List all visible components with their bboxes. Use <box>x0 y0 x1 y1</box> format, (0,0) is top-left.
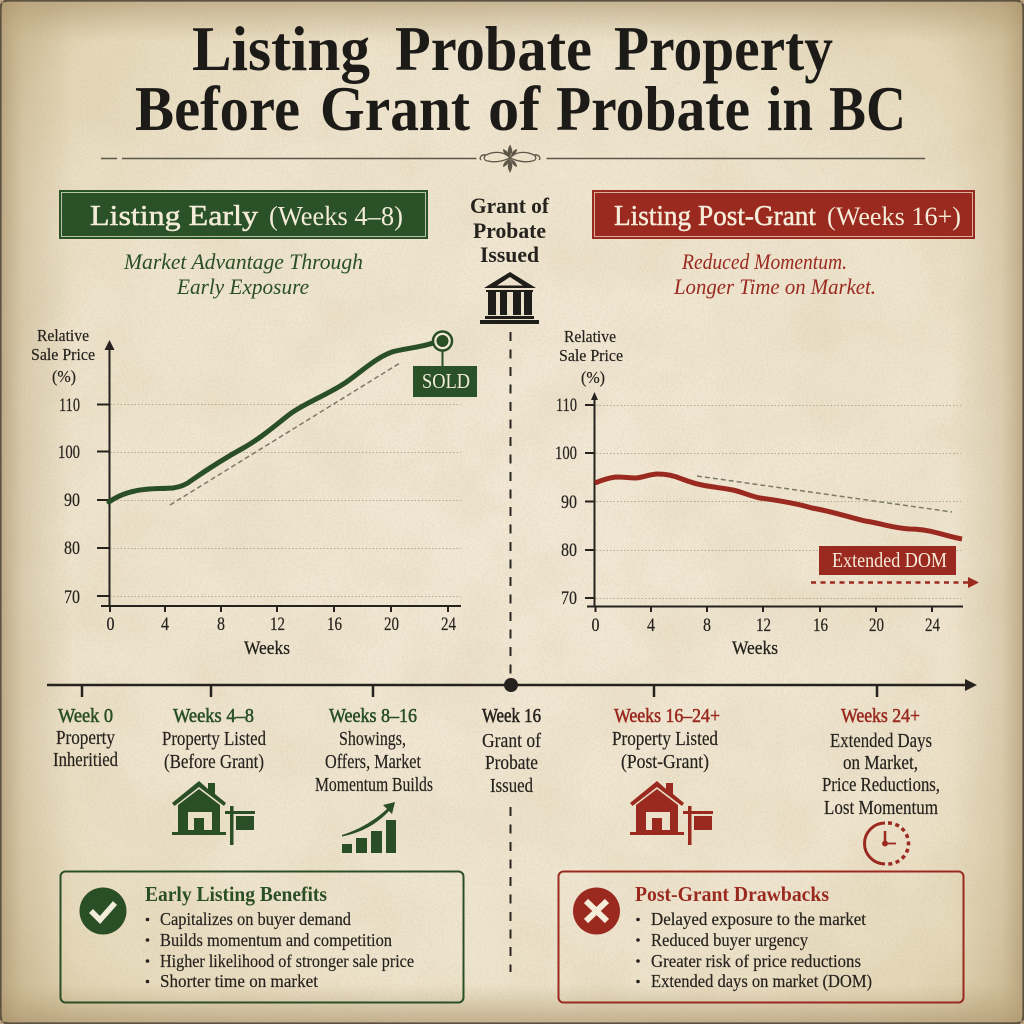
x tick labels: 0 <box>106 615 114 635</box>
timeline: week 16: Week 16 <box>482 705 541 727</box>
y tick labels: 70 <box>64 588 80 608</box>
x tick labels: 8 <box>217 615 225 635</box>
y axis title: Relative <box>37 326 89 345</box>
center label: grant of probate issued: Probate <box>473 218 546 243</box>
sold marker <box>413 332 477 397</box>
icon: clock <box>864 823 908 864</box>
axis arrow <box>104 340 114 350</box>
subtitle: market advantage <box>123 249 363 299</box>
icon: x mark <box>573 888 620 934</box>
y tick labels: 90 <box>561 493 577 513</box>
y tick labels: 110 <box>556 396 577 416</box>
timeline: weeks 4-8 <box>162 705 266 773</box>
drawbacks list: Greater risk of price reductions <box>651 951 861 971</box>
title: Probate <box>395 13 592 84</box>
timeline: weeks 8-16 <box>315 705 433 796</box>
subtitle: market advantage: Market Advantage Through <box>123 249 363 274</box>
benefits heading: Early Listing Benefits <box>145 882 327 906</box>
y tick labels: 110 <box>59 396 80 416</box>
timeline: weeks 24+: Lost Momentum <box>824 797 938 819</box>
timeline: weeks 24+ <box>822 705 940 819</box>
icon: green house with sign <box>172 781 255 845</box>
x axis title: Weeks <box>732 638 778 659</box>
timeline: weeks 8-16: Weeks 8–16 <box>329 705 417 727</box>
y tick labels: 90 <box>64 491 80 511</box>
x tick labels: 20 <box>384 615 399 635</box>
drawbacks heading: Post-Grant Drawbacks <box>635 882 829 906</box>
y tick labels <box>58 396 80 608</box>
red price curve <box>595 474 962 539</box>
timeline: weeks 4-8: (Before Grant) <box>164 751 264 773</box>
panel: listing early header: (Weeks 4–8) <box>269 201 403 231</box>
y tick labels <box>555 396 577 609</box>
x tick labels: 24 <box>441 615 456 635</box>
panel: early listing benefits <box>60 872 464 1002</box>
y axis title <box>559 327 623 387</box>
y tick labels: 70 <box>561 589 577 609</box>
center label: grant of probate issued: Issued <box>480 242 539 267</box>
x tick labels: 8 <box>703 616 711 636</box>
timeline: weeks 16-24+ <box>612 705 720 773</box>
chart: early listing sale price <box>31 326 477 659</box>
trend line <box>697 476 952 512</box>
center label: grant of probate issued <box>470 193 550 267</box>
y axis title: Relative <box>564 327 616 346</box>
center dashed divider <box>510 332 512 972</box>
drawbacks list: Reduced buyer urgency <box>651 930 808 950</box>
timeline: week 0 <box>53 705 118 771</box>
panel: listing post-grant header: (Weeks 16+) <box>827 202 961 231</box>
x tick labels: 12 <box>270 615 285 635</box>
benefits list: Shorter time on market <box>160 971 318 991</box>
timeline: week 16: Issued <box>490 775 533 797</box>
subtitle: market advantage: Early Exposure <box>176 274 309 299</box>
panel: listing post-grant header: Listing Post-Grant <box>614 201 816 232</box>
title <box>135 13 906 144</box>
green price curve <box>109 342 436 502</box>
timeline: weeks 8-16: Offers, Market <box>325 751 421 773</box>
icon: check mark <box>80 888 126 934</box>
x tick labels: 16 <box>327 615 342 635</box>
icon: courthouse <box>480 272 539 324</box>
panel: listing early header: Listing Early <box>90 200 259 232</box>
timeline: week 0: Week 0 <box>58 705 113 727</box>
timeline: weeks 16-24+: (Post-Grant) <box>621 751 709 773</box>
benefits list: Capitalizes on buyer demand <box>160 909 351 929</box>
y tick labels: 100 <box>58 443 80 463</box>
subtitle: reduced momentum: Longer Time on Market. <box>673 274 876 299</box>
axes <box>97 348 461 612</box>
title: Property <box>614 13 833 84</box>
y axis title: (%) <box>581 368 605 387</box>
timeline: weeks 24+: Weeks 24+ <box>841 705 920 727</box>
y tick labels: 80 <box>64 539 80 559</box>
y axis title: Sale Price <box>31 345 95 364</box>
axes <box>585 398 963 612</box>
center label: grant of probate issued: Grant of <box>470 193 550 218</box>
drawbacks list: Extended days on market (DOM) <box>651 971 872 992</box>
timeline: weeks 4-8: Weeks 4–8 <box>173 705 254 727</box>
x tick labels: 16 <box>813 616 828 636</box>
panel: listing early header <box>59 190 428 239</box>
title: in <box>767 73 813 144</box>
timeline: weeks 4-8: Property Listed <box>162 728 266 750</box>
timeline: weeks 16-24+: Property Listed <box>612 728 718 750</box>
drawbacks list <box>636 909 872 992</box>
icon: red house with sign <box>630 781 713 845</box>
x tick labels <box>592 616 940 636</box>
drawbacks list: Delayed exposure to the market <box>651 909 866 929</box>
timeline: weeks 24+: Price Reductions, <box>822 774 940 796</box>
panel: post-grant drawbacks <box>558 872 964 1002</box>
benefits list: Higher likelihood of stronger sale price <box>160 951 414 971</box>
chart: post-grant sale price <box>555 327 979 659</box>
benefits list: Builds momentum and competition <box>160 930 392 950</box>
extended DOM arrow <box>811 577 979 588</box>
y tick labels: 80 <box>561 541 577 561</box>
x tick labels: 4 <box>647 616 655 636</box>
timeline: weeks 8-16: Showings, <box>339 728 406 750</box>
y axis title <box>31 326 95 386</box>
panel: listing post-grant header <box>592 190 975 239</box>
timeline: week 16: Grant of <box>482 730 541 752</box>
timeline: week 16: Probate <box>485 752 538 774</box>
y axis title: Sale Price <box>559 346 623 365</box>
title: Probate <box>556 73 750 144</box>
timeline: weeks 24+: on Market, <box>843 752 918 774</box>
icon: rising bar chart <box>342 802 396 853</box>
x axis title: Weeks <box>244 638 290 659</box>
trend line <box>170 363 400 505</box>
title: Grant <box>320 73 471 144</box>
x tick labels: 0 <box>592 616 600 636</box>
title divider ornament <box>101 144 925 173</box>
timeline axis <box>47 678 977 697</box>
x tick labels: 20 <box>869 616 884 636</box>
x tick labels <box>106 615 456 635</box>
title: BC <box>829 73 906 144</box>
x tick labels: 4 <box>161 615 169 635</box>
timeline: week 16 <box>482 705 541 797</box>
timeline: week 0: Inheritied <box>53 749 118 771</box>
axis arrow <box>591 392 598 400</box>
subtitle: reduced momentum <box>673 249 876 299</box>
x tick labels: 12 <box>756 616 771 636</box>
y axis title: (%) <box>52 367 76 386</box>
title: Before <box>135 73 300 144</box>
timeline: weeks 16-24+: Weeks 16–24+ <box>614 705 720 727</box>
timeline: weeks 24+: Extended Days <box>830 730 932 752</box>
subtitle: reduced momentum: Reduced Momentum. <box>681 249 847 274</box>
y tick labels: 100 <box>555 444 577 464</box>
benefits list <box>146 909 414 991</box>
sold marker: SOLD <box>422 369 470 393</box>
timeline: weeks 8-16: Momentum Builds <box>315 774 433 796</box>
x tick labels: 24 <box>925 616 940 636</box>
extended DOM label: Extended DOM <box>832 548 947 572</box>
title: Listing <box>192 13 370 84</box>
title: of <box>488 73 541 144</box>
timeline: week 0: Property <box>56 727 115 749</box>
